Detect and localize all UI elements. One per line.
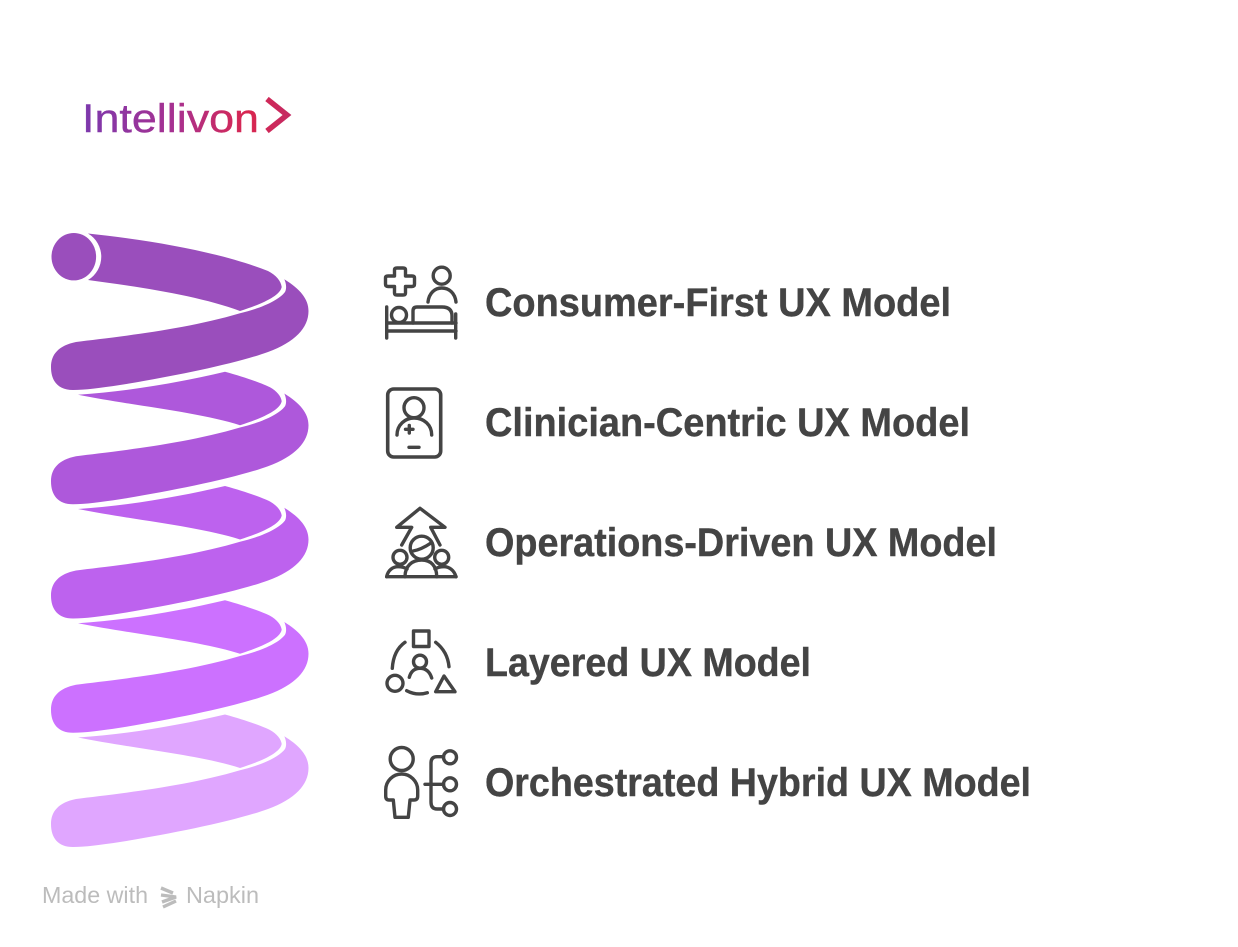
icon: Napkin logo	[161, 888, 176, 907]
heading: Layered UX Model: Layered UX Model	[485, 641, 811, 685]
heading: Clinician-Centric UX Model: Clinician-Centric UX Model	[485, 401, 970, 445]
spiral coil 5	[51, 714, 308, 847]
spiral coil 1	[51, 233, 308, 390]
heading: Orchestrated Hybrid UX Model: Orchestrated Hybrid UX Model	[485, 761, 1031, 805]
heading: Consumer-First UX Model: Consumer-First UX Model	[485, 281, 951, 325]
icon: person with branching nodes	[386, 748, 456, 817]
heading: Operations-Driven UX Model: Operations-Driven UX Model	[485, 521, 997, 565]
item 2: Clinician-Centric UX Model	[388, 389, 970, 457]
watermark: Made with Napkin: Napkin	[186, 882, 259, 908]
spiral graphic	[51, 233, 308, 847]
spiral coil 3	[51, 486, 308, 618]
item 5: Orchestrated Hybrid UX Model	[386, 748, 1031, 817]
icon: patient in bed with medical cross and carer	[386, 267, 456, 338]
icon: clinician on tablet	[388, 389, 441, 457]
watermark: Made with Napkin: Made with	[42, 882, 148, 908]
item 4: Layered UX Model	[387, 631, 811, 694]
item 1: Consumer-First UX Model	[386, 267, 951, 338]
icon: team with upward arrow	[387, 508, 456, 577]
logo: Intellivon: Intellivon	[82, 97, 259, 141]
spiral coil 2	[51, 372, 308, 504]
item 3: Operations-Driven UX Model	[387, 508, 997, 577]
watermark: Made with Napkin	[42, 882, 259, 908]
spiral coil 4	[51, 600, 308, 733]
icon: person surrounded by shapes	[387, 631, 455, 694]
